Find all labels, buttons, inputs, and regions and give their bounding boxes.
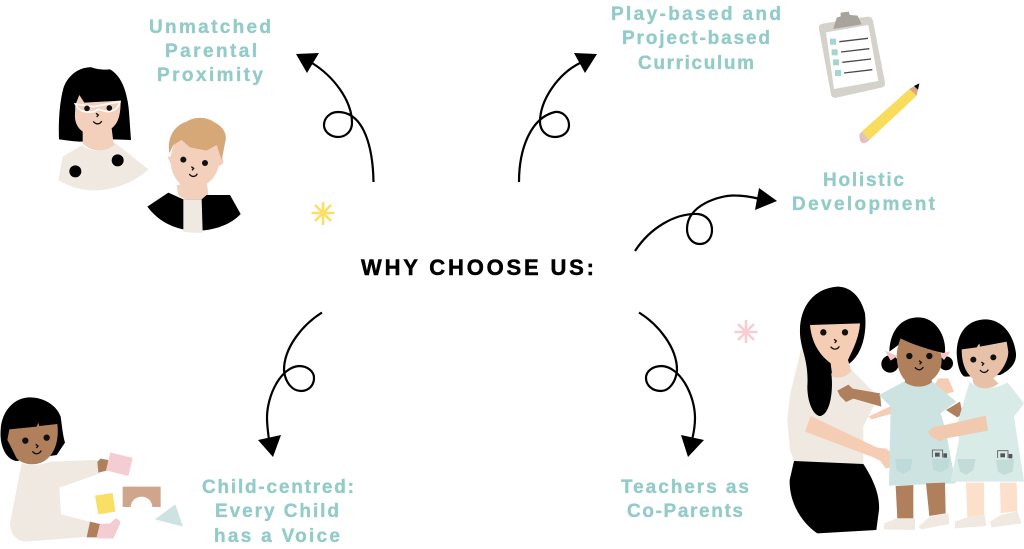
arrow: to curriculum bbox=[519, 53, 597, 182]
child one bbox=[837, 317, 963, 530]
teacher bbox=[787, 287, 897, 533]
arrow: to holistic development bbox=[635, 188, 777, 251]
illustration: teacher with two children bbox=[787, 287, 1024, 533]
child two bbox=[928, 319, 1024, 528]
yellow block bbox=[95, 493, 115, 514]
label: teachers as co-parents: Teachers as bbox=[621, 477, 749, 498]
label: holistic development: Development bbox=[792, 194, 936, 215]
label: holistic development bbox=[792, 170, 936, 215]
title: WHY CHOOSE US: bbox=[361, 255, 594, 280]
mother bbox=[58, 67, 148, 190]
label: curriculum: Curriculum bbox=[638, 53, 754, 74]
label: parental proximity: Proximity bbox=[157, 65, 263, 86]
illustration: child with blocks bbox=[1, 397, 183, 542]
pink block bbox=[106, 452, 133, 476]
arrow: to teachers bbox=[639, 312, 704, 457]
child bbox=[1, 397, 120, 542]
illustration: clipboard and pencil bbox=[819, 12, 919, 143]
arrow: to parental proximity bbox=[296, 53, 374, 182]
label: parental proximity: Unmatched bbox=[149, 17, 271, 38]
label: child-centred: Child-centred: bbox=[202, 477, 354, 498]
pencil bbox=[859, 83, 919, 143]
triangle block bbox=[155, 504, 183, 527]
label: parental proximity bbox=[149, 17, 271, 86]
label: holistic development: Holistic bbox=[823, 170, 904, 191]
label: child-centred: Every Child bbox=[215, 501, 339, 522]
label: child-centred bbox=[202, 477, 354, 547]
clipboard bbox=[819, 12, 885, 98]
arch block bbox=[123, 487, 161, 507]
label: curriculum: Play-based and bbox=[611, 4, 781, 25]
arrow: to child-centred bbox=[258, 312, 322, 457]
son bbox=[147, 118, 241, 233]
label: parental proximity: Parental bbox=[165, 41, 257, 62]
illustration: mother and son bbox=[58, 67, 241, 233]
icon: yellow star bbox=[312, 202, 334, 225]
label: teachers as co-parents: Co-Parents bbox=[627, 501, 743, 522]
label: curriculum: Project-based bbox=[622, 28, 770, 49]
label: child-centred: has a Voice bbox=[214, 526, 340, 547]
label: curriculum bbox=[611, 4, 781, 74]
label: teachers as co-parents bbox=[621, 477, 749, 522]
icon: pink star bbox=[734, 320, 758, 343]
